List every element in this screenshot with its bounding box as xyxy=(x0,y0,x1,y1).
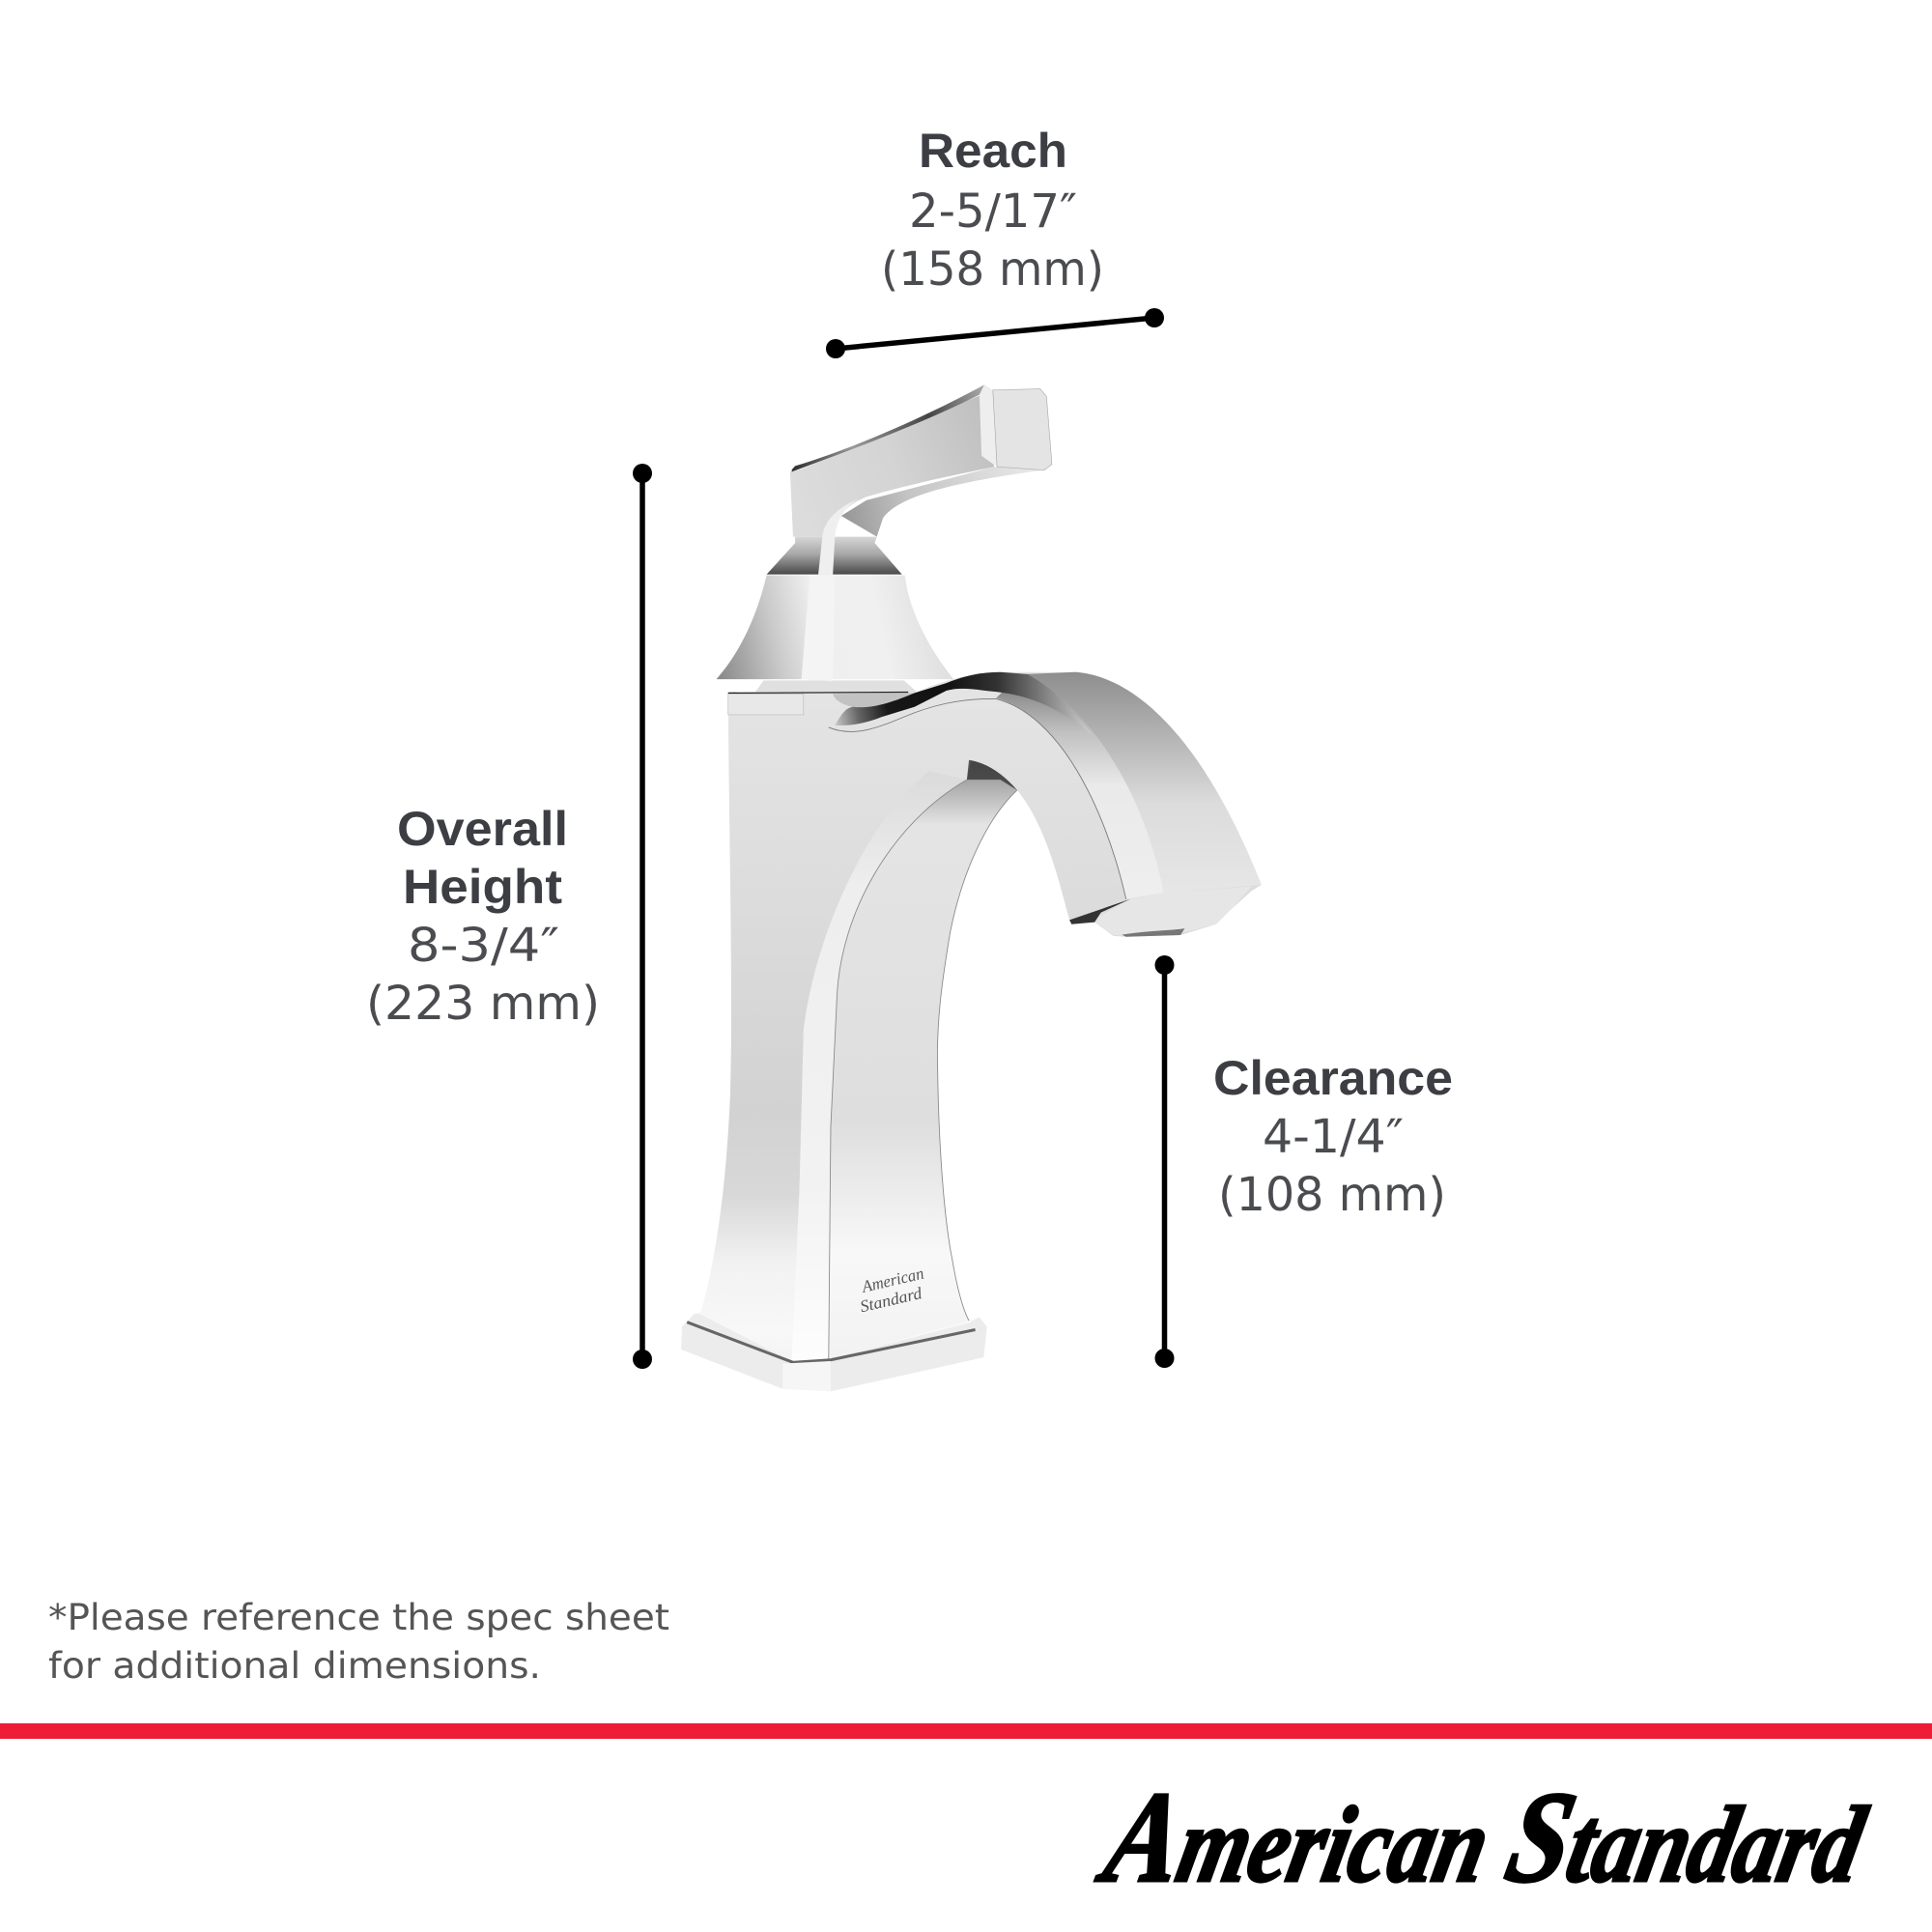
handle end cap xyxy=(993,389,1052,470)
spout bevel strip xyxy=(996,674,1164,899)
collar xyxy=(767,537,902,575)
label: overall height xyxy=(366,802,600,1031)
handle end bevel xyxy=(980,384,997,467)
engraved logo on body xyxy=(854,1264,930,1316)
cone seam xyxy=(802,576,835,681)
red divider bar xyxy=(0,1723,1932,1739)
label: clearance: 4-1/4″ xyxy=(1263,1110,1404,1164)
label: reach: Reach xyxy=(919,124,1067,178)
footnote: *Please reference the spec sheet xyxy=(48,1597,669,1638)
aerator edge shadow xyxy=(1069,899,1130,924)
arch outer line xyxy=(937,790,1017,1321)
reach dimension line xyxy=(826,308,1164,358)
arch inner panel xyxy=(829,761,1017,1359)
aerator screen xyxy=(1122,928,1184,937)
bright strip inner line xyxy=(829,780,967,1359)
faucet body and spout silhouette xyxy=(681,672,1262,1391)
engraved logo on body: American xyxy=(860,1264,925,1296)
label: reach xyxy=(881,124,1104,297)
bright front strip xyxy=(792,771,967,1361)
label: overall height: Height xyxy=(403,860,562,914)
body top edge xyxy=(728,691,908,695)
label: overall height: Overall xyxy=(397,802,568,856)
lever handle face xyxy=(790,395,994,537)
aerator xyxy=(1093,887,1252,936)
engraved logo on body: Standard xyxy=(859,1284,924,1316)
overall height dimension line xyxy=(633,464,652,1369)
label: overall height: (223 mm) xyxy=(366,977,600,1031)
spout front line xyxy=(829,698,1126,899)
clearance dimension line xyxy=(1155,955,1175,1368)
base plate xyxy=(681,1314,987,1391)
label: clearance: Clearance xyxy=(1213,1051,1453,1105)
handle centre seam xyxy=(818,499,858,576)
label: reach: 2-5/17″ xyxy=(909,185,1077,239)
faucet illustration xyxy=(681,384,1262,1391)
handle top edge shadow xyxy=(792,384,984,471)
cone base of handle xyxy=(717,576,953,679)
handle underside xyxy=(841,467,1044,537)
raised body top plate xyxy=(728,694,804,715)
base shadow lines xyxy=(687,1322,976,1362)
neck ring xyxy=(755,680,917,692)
spout top face xyxy=(1026,672,1262,893)
label: clearance: (108 mm) xyxy=(1218,1168,1446,1222)
brand logo: American Standard xyxy=(1088,1764,1880,1910)
base front corner xyxy=(782,1361,831,1391)
label: clearance xyxy=(1213,1051,1453,1222)
wave reflection on spout xyxy=(947,672,1093,736)
arch top shadow xyxy=(967,760,1017,790)
footnote xyxy=(48,1597,669,1687)
dark hollow and reflection under lever xyxy=(835,675,983,725)
footnote: for additional dimensions. xyxy=(48,1645,541,1687)
label: overall height: 8-3/4″ xyxy=(408,919,559,973)
label: reach: (158 mm) xyxy=(881,242,1104,297)
lower neck ring xyxy=(833,693,915,708)
